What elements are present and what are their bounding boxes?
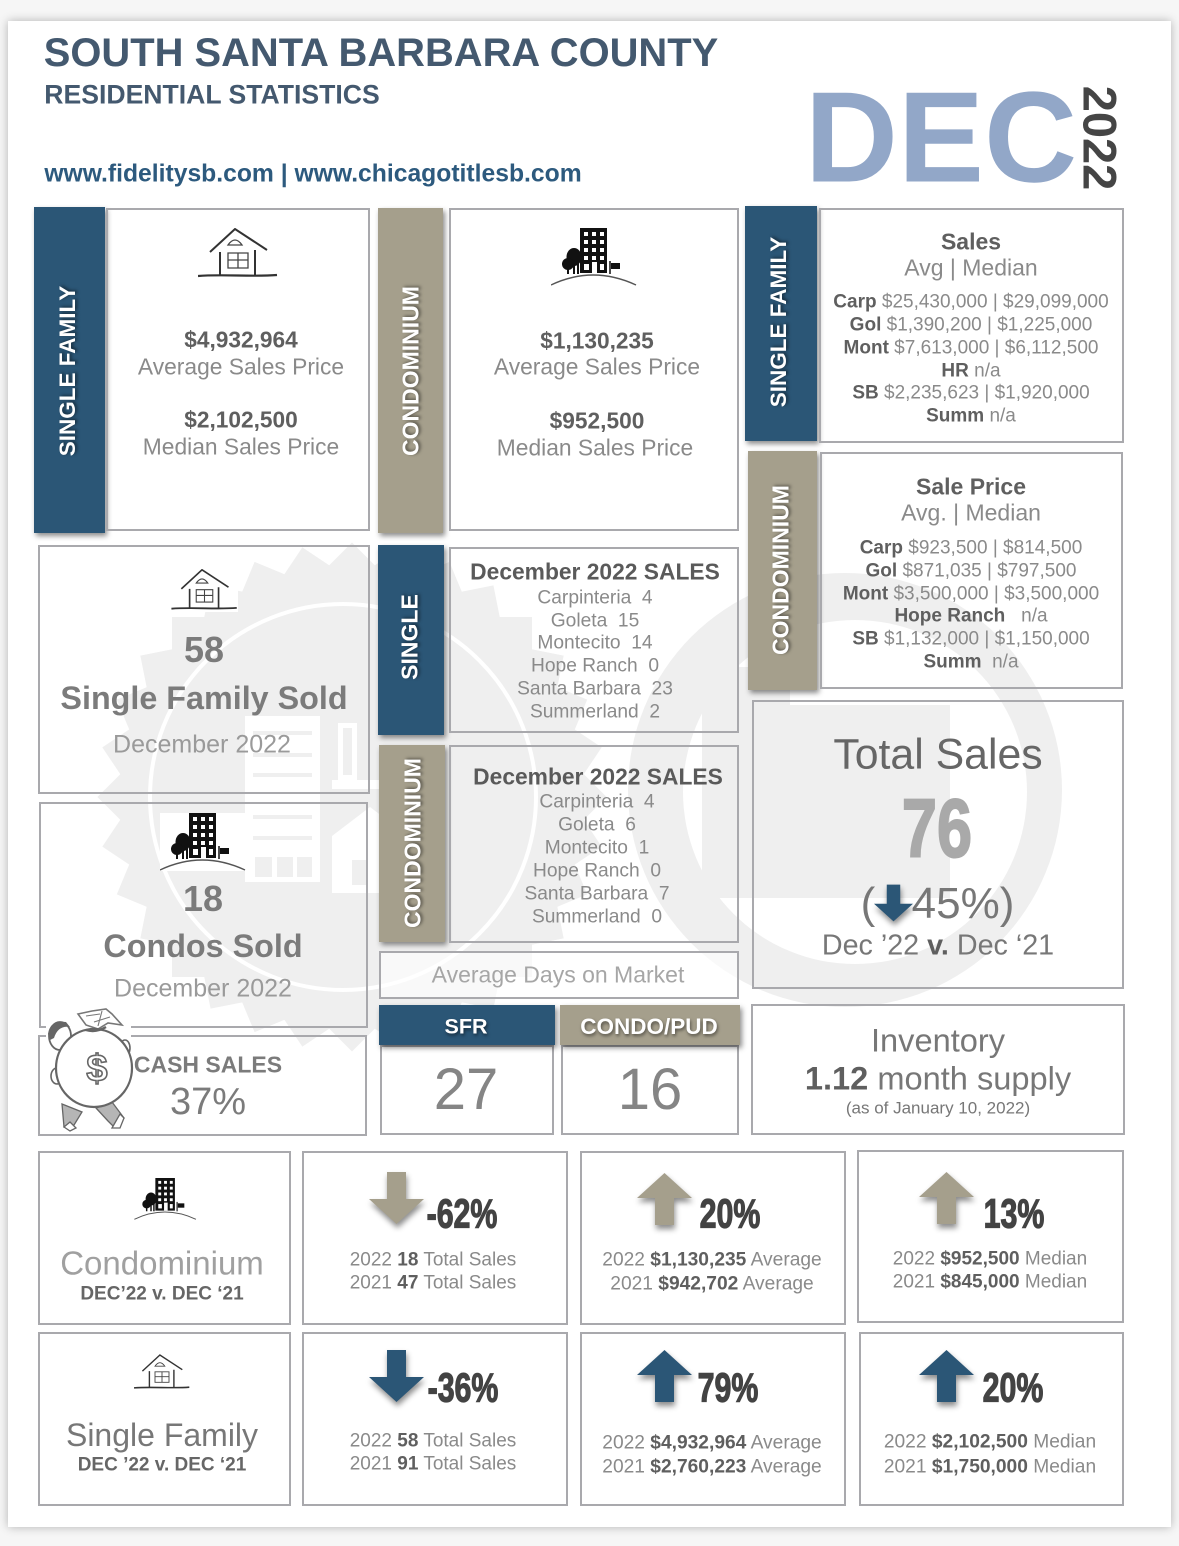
icon: house: [134, 1354, 190, 1389]
website links: www.fidelitysb.com | www.chicagotitlesb.com: [44, 161, 582, 188]
median label: Median Sales Price: [497, 435, 693, 461]
tab: single family area sales: [745, 206, 817, 441]
panel: single family sold: [38, 545, 370, 794]
area: Hope Ranch: Hope Ranch 0: [531, 655, 659, 676]
header: [560, 1005, 740, 1045]
subheading: Avg | Median: [904, 254, 1038, 280]
panel: single December sales: [449, 547, 739, 733]
average label: Average Sales Price: [138, 354, 344, 380]
tab label: SINGLE FAMILY: [766, 237, 791, 407]
total value: 76: [902, 782, 972, 874]
area: Carpinteria: Carp $25,430,000 | $29,099,000: [833, 292, 1109, 312]
area: Hope Ranch: Hope Ranch n/a: [894, 606, 1048, 626]
area: Montecito: Mont $7,613,000 | $6,112,500: [844, 338, 1098, 358]
comparison period: Dec ’22 v. Dec ‘21: [822, 930, 1054, 962]
value box: [561, 1045, 739, 1135]
panel: single family total sales change: [302, 1332, 568, 1506]
panel: average days on market heading: [379, 951, 739, 999]
title: SOUTH SANTA BARBARA COUNTY: [44, 31, 718, 75]
percent: 20%: [700, 1190, 760, 1236]
2021 value: 2021 $2,760,223 Average: [602, 1456, 822, 1477]
icon: down arrow: [874, 884, 914, 928]
area: Summerland: Summ n/a: [923, 652, 1019, 672]
value box: [380, 1045, 554, 1135]
2022 value: 2022 $4,932,964 Average: [602, 1432, 822, 1453]
percent: 13%: [984, 1190, 1044, 1236]
median label: Median Sales Price: [143, 434, 339, 460]
area: Montecito: Montecito 14: [537, 632, 653, 653]
average price: $4,932,964: [184, 327, 298, 353]
area: Goleta: Gol $871,035 | $797,500: [866, 560, 1076, 582]
tab label: CONDOMINIUM: [400, 758, 426, 928]
tab label: CONDOMINIUM: [768, 485, 794, 655]
label: Condominium: [60, 1244, 264, 1282]
icon: man carrying money bag: [46, 1008, 134, 1132]
heading: Inventory: [871, 1022, 1005, 1059]
period: DEC’22 v. DEC ‘21: [80, 1284, 244, 1304]
panel: condo average change: [580, 1151, 846, 1325]
area: Santa Barbara: Santa Barbara 7: [524, 883, 670, 904]
header label: CONDO/PUD: [580, 1014, 718, 1039]
panel: single family comparison heading: [38, 1332, 291, 1506]
average price: $1,130,235: [540, 328, 654, 354]
median price: $2,102,500: [184, 407, 298, 433]
label: Condos Sold: [103, 928, 303, 964]
icon: man carrying money bag: $: [86, 1048, 108, 1090]
tab: single sales: [378, 545, 444, 735]
percent: 20%: [983, 1364, 1043, 1410]
panel: inventory: [751, 1004, 1125, 1135]
panel: single family average change: [580, 1332, 846, 1506]
area: Hope Ranch: HR n/a: [941, 360, 1001, 382]
median price: $952,500: [550, 408, 644, 434]
2022 value: 2022 $1,130,235 Average: [602, 1249, 822, 1270]
month heading: DEC: [805, 66, 1077, 210]
panel: condo total sales change: [302, 1151, 568, 1325]
tab: single family: [34, 207, 105, 533]
2021 value: 2021 $845,000 Median: [893, 1272, 1087, 1292]
period: December 2022: [114, 974, 292, 1002]
icon: down arrow: [369, 1172, 426, 1230]
heading: Total Sales: [833, 731, 1043, 779]
2022 value: 2022 $2,102,500 Median: [884, 1431, 1096, 1452]
area: Carpinteria: Carp $923,500 | $814,500: [860, 538, 1082, 558]
area: Santa Barbara: Santa Barbara 23: [517, 678, 673, 699]
2021 value: 2021 $942,702 Average: [610, 1273, 814, 1294]
header: [379, 1005, 555, 1045]
percent: -62%: [427, 1190, 497, 1236]
area: Goleta: Goleta 15: [551, 610, 639, 631]
period: DEC ’22 v. DEC ‘21: [78, 1454, 246, 1476]
area: Summerland: Summ n/a: [926, 406, 1016, 426]
area: Hope Ranch: Hope Ranch 0: [533, 860, 661, 881]
area: Santa Barbara: SB $2,235,623 | $1,920,000: [852, 382, 1090, 404]
panel: condominium December sales: [449, 745, 739, 943]
open parenthesis: (: [861, 879, 875, 928]
area: Summerland: Summerland 0: [532, 906, 662, 927]
panel: single family prices: [106, 208, 370, 531]
tab: condominium area prices: [748, 451, 817, 690]
area: Montecito: Mont $3,500,000 | $3,500,000: [843, 584, 1099, 604]
icon: house: [171, 569, 238, 612]
tab label: SINGLE: [396, 594, 422, 680]
value: 1.12 month supply: [805, 1060, 1071, 1097]
panel: cash sales: [38, 1035, 367, 1136]
heading: December 2022 SALES: [470, 559, 720, 585]
tab: condominium: [378, 208, 443, 533]
count: 18: [183, 878, 223, 919]
panel: condominium prices: [449, 208, 739, 531]
area: Summerland: Summerland 2: [530, 701, 660, 722]
year heading: 2022: [1074, 86, 1126, 190]
panel: condominium sale price by area: [820, 452, 1123, 689]
percent: -36%: [428, 1364, 498, 1410]
tab: condominium sales: [379, 745, 445, 942]
tab label: CONDOMINIUM: [398, 286, 424, 456]
value: 37%: [170, 1081, 246, 1123]
panel: total sales: [752, 700, 1124, 989]
note: (as of January 10, 2022): [846, 1098, 1030, 1118]
percent change: 45%): [912, 879, 1014, 928]
area: Goleta: Goleta 6: [558, 814, 636, 835]
value: 27: [434, 1057, 498, 1122]
icon: up arrow: [919, 1172, 976, 1232]
tab label: SINGLE FAMILY: [55, 286, 80, 456]
panel: condo median change: [857, 1150, 1124, 1323]
2021 value: 2021 $1,750,000 Median: [884, 1456, 1096, 1477]
period: December 2022: [113, 730, 291, 758]
icon: condo building: [160, 813, 246, 871]
area: Carpinteria: Carpinteria 4: [537, 587, 653, 608]
icon: house: [198, 228, 278, 278]
icon: condo building: [134, 1178, 196, 1220]
percent: 79%: [698, 1364, 758, 1410]
label: Single Family: [66, 1417, 258, 1453]
panel: condo/PUD days on market: [558, 1004, 746, 1135]
panel: SFR days on market: [378, 1004, 560, 1135]
heading: Sales: [941, 228, 1001, 254]
heading: December 2022 SALES: [473, 764, 723, 790]
panel: single family median change: [859, 1332, 1124, 1506]
2021 value: 2021 47 Total Sales: [350, 1272, 516, 1294]
panel: condos sold: [39, 802, 368, 1028]
label: Single Family Sold: [60, 680, 348, 716]
header label: SFR: [444, 1014, 488, 1038]
heading text: Average Days on Market: [432, 962, 684, 988]
area: Carpinteria: Carpinteria 4: [539, 791, 655, 812]
icon: down arrow: [369, 1350, 426, 1408]
2022 value: 2022 18 Total Sales: [350, 1250, 516, 1270]
area: Montecito: Montecito 1: [545, 837, 649, 858]
icon: up arrow: [919, 1350, 976, 1410]
average label: Average Sales Price: [494, 354, 700, 380]
2021 value: 2021 91 Total Sales: [350, 1454, 516, 1474]
icon: up arrow: [637, 1173, 694, 1233]
area: Goleta: Gol $1,390,200 | $1,225,000: [850, 314, 1092, 336]
icon: condo building: [551, 228, 636, 286]
value: 16: [618, 1057, 682, 1122]
heading: Sale Price: [916, 474, 1026, 500]
subtitle: RESIDENTIAL STATISTICS: [44, 80, 380, 110]
panel: single family sales by area: [819, 208, 1124, 443]
2022 value: 2022 $952,500 Median: [893, 1248, 1087, 1270]
count: 58: [184, 629, 224, 670]
label: CASH SALES: [134, 1052, 282, 1078]
2022 value: 2022 58 Total Sales: [350, 1430, 516, 1452]
icon: up arrow: [637, 1350, 694, 1410]
area: Santa Barbara: SB $1,132,000 | $1,150,000: [852, 628, 1090, 650]
subheading: Avg. | Median: [901, 500, 1041, 526]
panel: condominium comparison heading: [38, 1151, 291, 1325]
